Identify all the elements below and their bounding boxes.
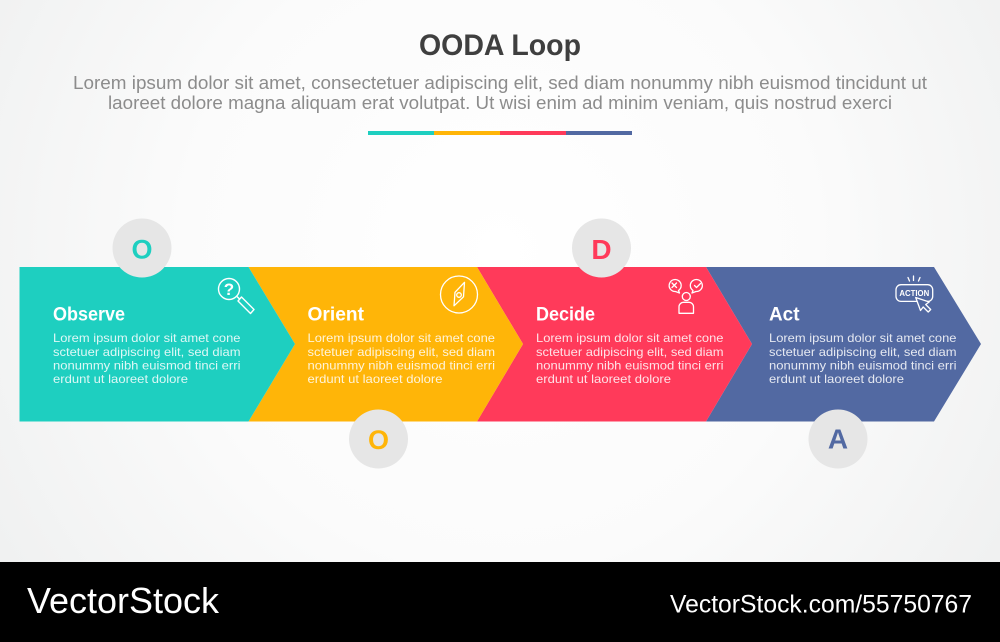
observe body text: Lorem ipsum dolor sit amet cone [53,331,241,345]
decide body text: nonummy nibh euismod tinci erri [536,358,724,372]
act body text: Lorem ipsum dolor sit amet cone [769,331,957,345]
decide arrow shape [477,267,752,422]
act body text [769,331,957,386]
icon: action button with cursor: ACTION [899,289,930,298]
observe body text: erdunt ut laoreet dolore [53,372,188,386]
footer brand: VectorStock [27,580,220,621]
decide heading: Decide [536,304,595,326]
footer url: VectorStock.com/55750767 [670,590,972,618]
badge: A act [808,410,868,468]
badge: D decide [572,218,631,278]
icon: magnifier with question mark: ? [224,280,234,299]
observe heading: Observe [53,304,125,326]
subtitle [73,72,927,113]
icon: magnifier with question mark [218,278,254,314]
panel: act [706,267,981,422]
orient body text: nonummy nibh euismod tinci erri [308,358,495,372]
act body text: sctetuer adipiscing elit, sed diam [769,345,957,359]
act arrow shape [706,267,981,422]
decide body text: sctetuer adipiscing elit, sed diam [536,345,724,359]
colour divider bar [368,131,632,135]
icon: compass [440,276,478,313]
decide body text [536,331,724,386]
badge: O observe [112,218,172,278]
icon: action button with cursor [896,276,933,312]
icon: decision person with speech bubbles [669,280,702,313]
orient body text: sctetuer adipiscing elit, sed diam [308,345,495,359]
panel: decide [477,267,752,422]
observe body text [53,331,241,386]
act heading: Act [769,304,800,326]
badge: O observe: O [131,234,153,264]
footer band [0,562,1000,642]
badge: O orient: O [368,425,389,455]
decide body text: erdunt ut laoreet dolore [536,372,671,386]
panel: orient [248,267,523,422]
subtitle: laoreet dolore magna aliquam erat volutpat. Ut wisi enim ad minim veniam, quis nostrud exerci [108,92,892,113]
act body text: nonummy nibh euismod tinci erri [769,358,956,372]
act body text: erdunt ut laoreet dolore [769,372,904,386]
orient arrow shape [248,267,523,422]
observe arrow shape [20,267,295,422]
orient heading: Orient [308,304,364,326]
orient body text: erdunt ut laoreet dolore [308,372,443,386]
orient body text [308,331,495,386]
panel: observe [20,267,295,422]
title: OODA Loop [419,29,581,62]
observe body text: sctetuer adipiscing elit, sed diam [53,345,241,359]
orient body text: Lorem ipsum dolor sit amet cone [308,331,495,345]
subtitle: Lorem ipsum dolor sit amet, consectetuer adipiscing elit, sed diam nonummy nibh euismod tincidunt ut [73,72,927,93]
badge: A act: A [828,424,848,454]
decide body text: Lorem ipsum dolor sit amet cone [536,331,724,345]
badge: D decide: D [591,234,612,265]
badge: O orient [349,410,408,468]
observe body text: nonummy nibh euismod tinci erri [53,358,240,372]
